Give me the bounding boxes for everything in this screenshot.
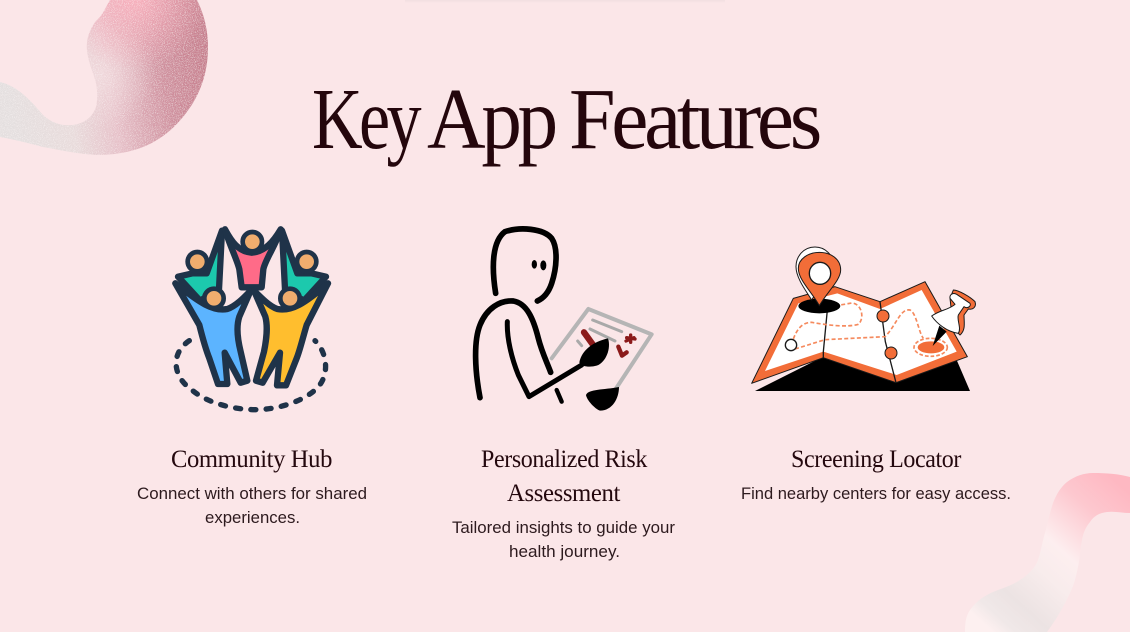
title: App: [427, 70, 556, 167]
text: community hub description: experiences.: [205, 509, 300, 527]
panel: screening locator: [741, 247, 1011, 503]
heading: personalized risk assessment: [481, 444, 648, 507]
heading: personalized risk assessment: Personalized Risk: [481, 444, 648, 473]
icon: person reading report: [476, 229, 652, 411]
text: community hub description: Connect with others for shared: [137, 485, 367, 503]
text: community hub description: [137, 485, 367, 527]
icon: map with pins: [752, 247, 975, 391]
text: risk assessment description: health journey.: [509, 543, 620, 561]
panel: personalized risk assessment: [452, 229, 676, 561]
decorative blob: bottom right: [965, 473, 1130, 632]
title: [312, 70, 820, 167]
panel: community hub: [137, 229, 367, 527]
text: screening locator description: Find nearby centers for easy access.: [741, 485, 1011, 503]
heading: community hub: Community Hub: [171, 444, 332, 473]
title: Features: [569, 70, 820, 167]
text: risk assessment description: Tailored insights to guide your: [452, 519, 676, 537]
heading: screening locator: Screening Locator: [791, 444, 962, 473]
title: Key: [312, 70, 422, 167]
text: risk assessment description: [452, 519, 676, 561]
decorative blob: top left: [0, 0, 208, 155]
icon: community group: [175, 229, 328, 410]
heading: personalized risk assessment: Assessment: [507, 478, 620, 507]
